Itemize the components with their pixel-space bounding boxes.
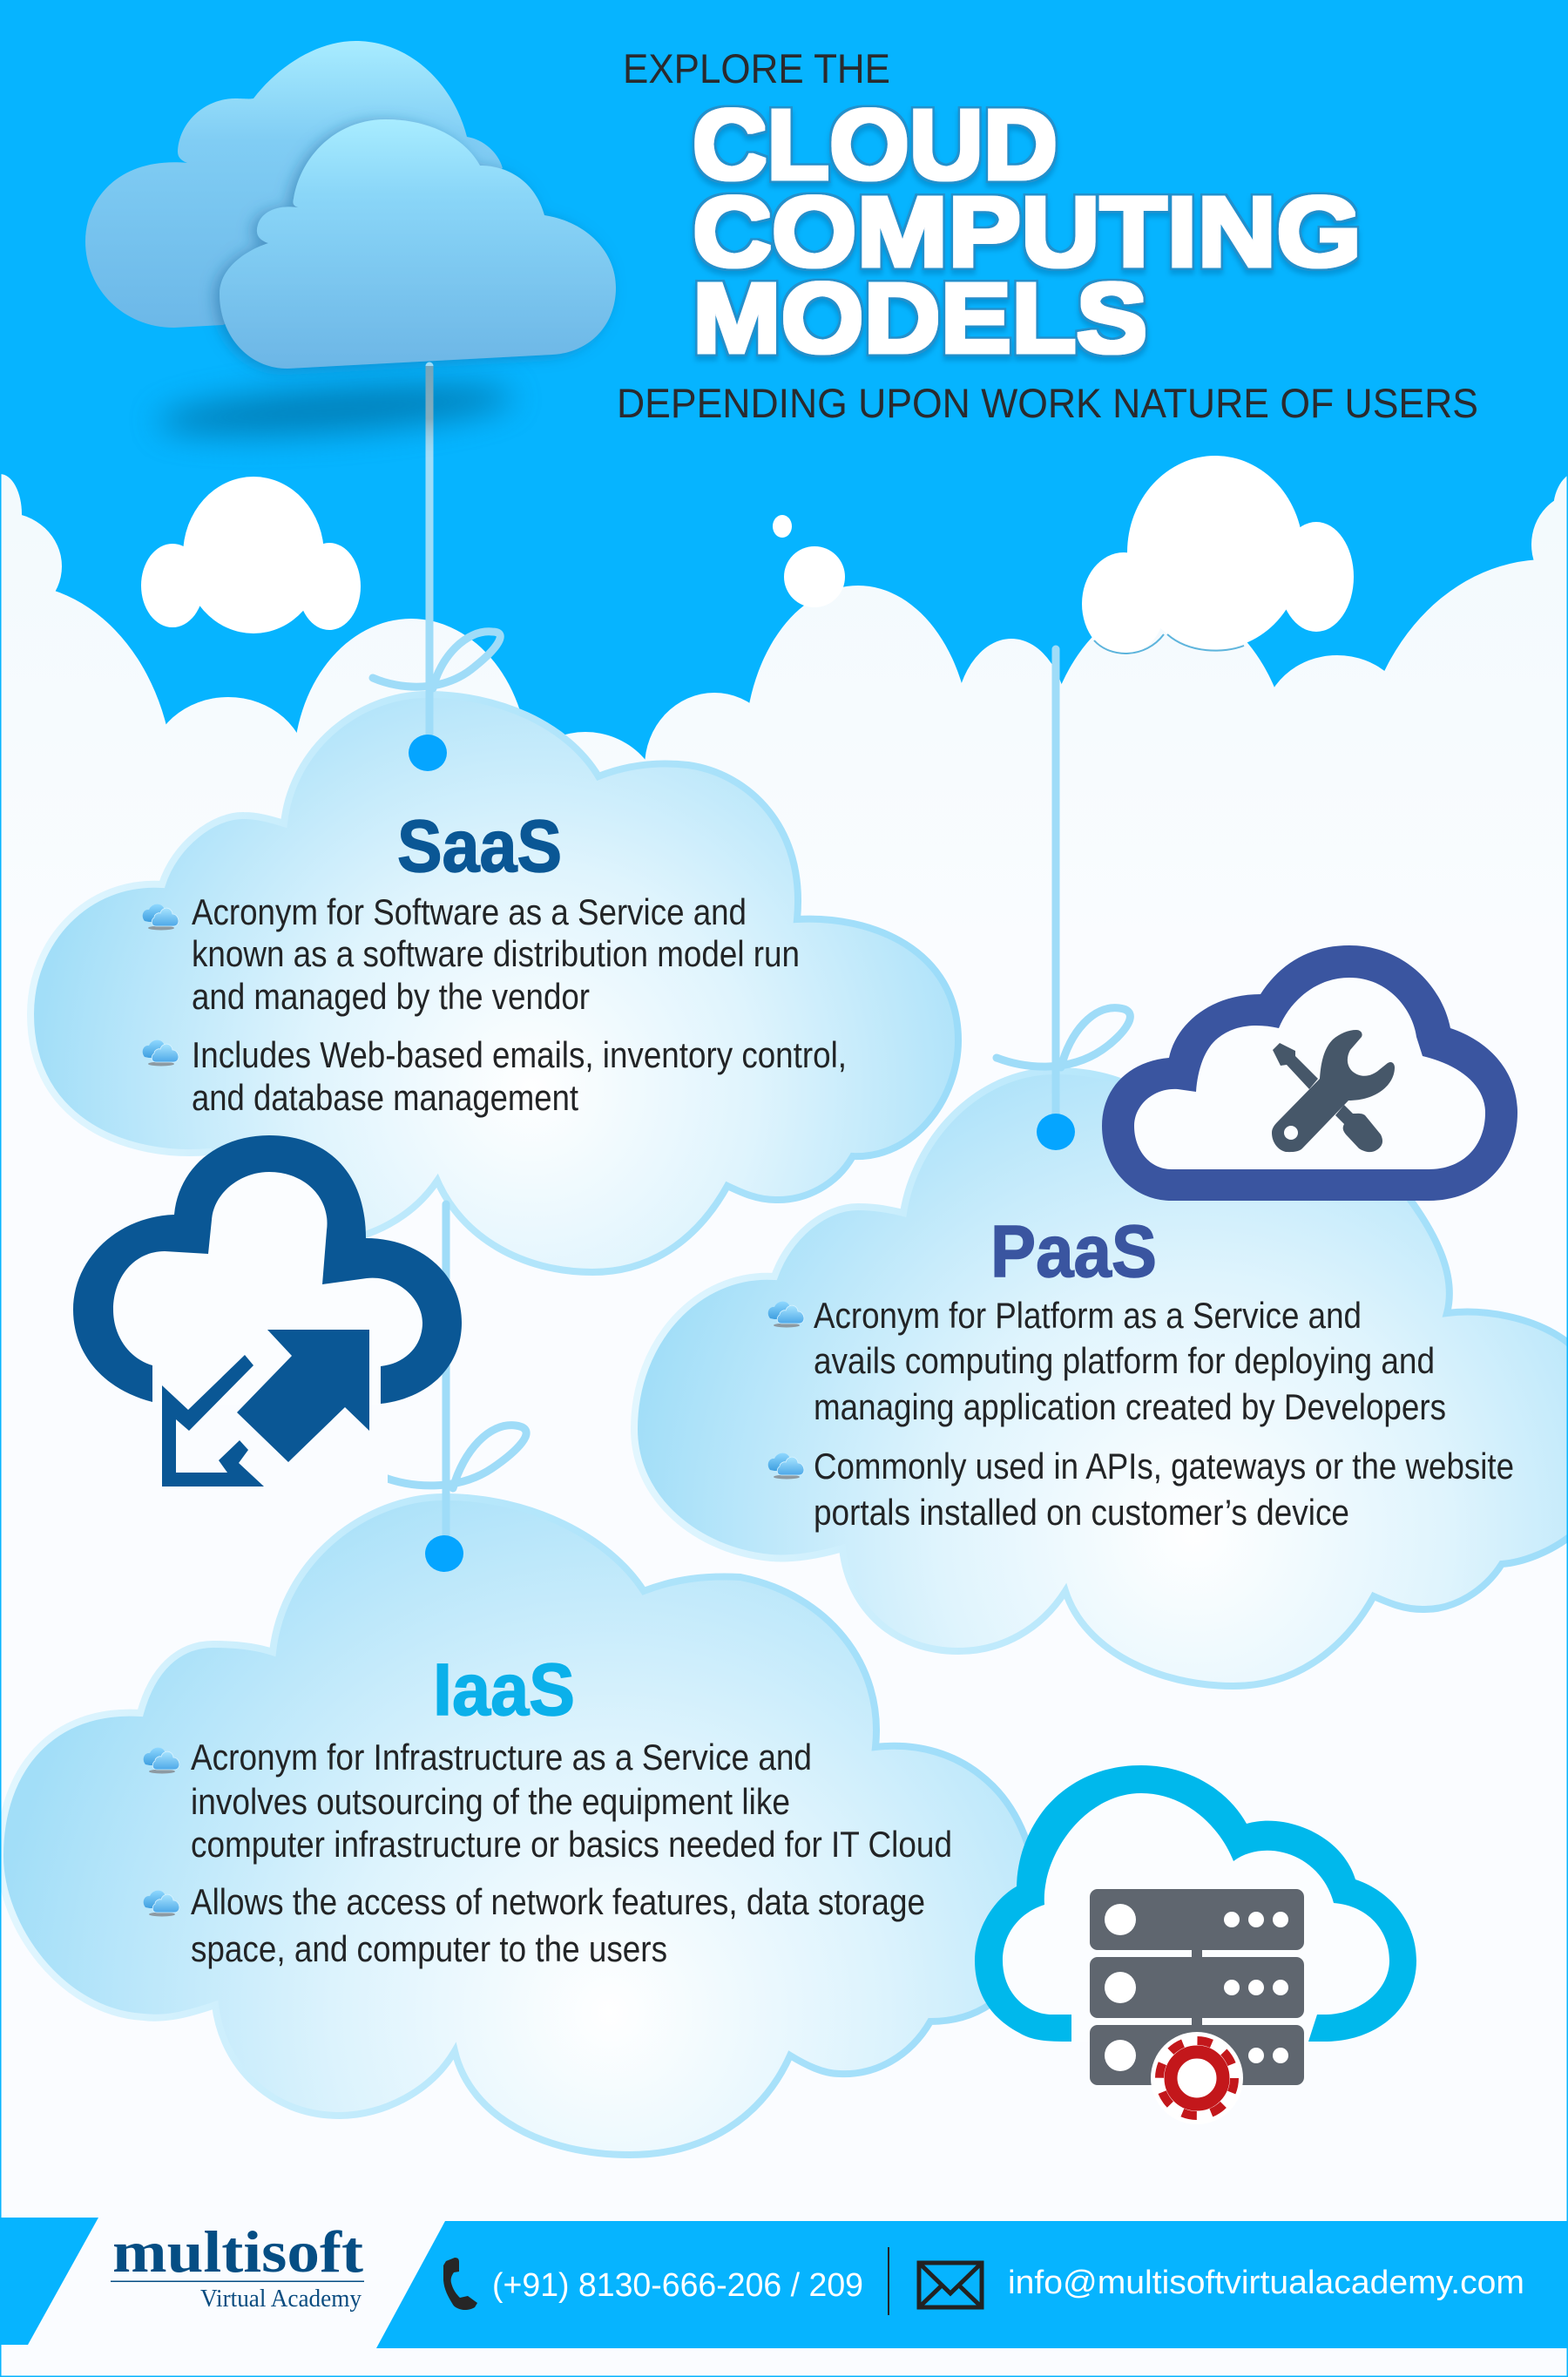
icon: red gear [1151,2032,1243,2124]
SaaS string with bow and pin [373,366,500,771]
floating white cloudlet centre [773,515,845,607]
PaaS bullet 1: Acronym for Platform as a Service and [814,1295,1362,1336]
title block [617,45,1478,426]
footer [0,2218,1568,2348]
icon: phone [443,2258,477,2310]
email: info@multisoftvirtualacademy.com [1008,2265,1524,2301]
icon: envelope [919,2263,982,2307]
IaaS bullet 1: Acronym for Infrastructure as a Service and [191,1737,812,1778]
icon: PaaS cloud with tools [1102,945,1517,1201]
SaaS cloud shape [30,694,958,1272]
IaaS bullet 1: involves outsourcing of the equipment like [191,1781,790,1822]
SaaS bullet 1: and managed by the vendor [192,976,590,1017]
SaaS bullet 2: and database management [192,1077,578,1118]
main title: COMPUTING [693,177,1362,287]
IaaS string with bow and pin [381,1204,526,1572]
logo: Virtual Academy [200,2285,362,2313]
main title: MODELS [693,263,1147,373]
blue sky band [0,0,1568,836]
IaaS bullet 2: space, and computer to the users [191,1928,667,1969]
white cloud landscape [0,471,1568,1011]
SaaS bullet 1 [143,891,800,1017]
phone number: (+91) 8130-666-206 / 209 [492,2267,863,2304]
big 3D cloud with shadow [85,41,616,444]
divider [888,2247,889,2315]
title subline: DEPENDING UPON WORK NATURE OF USERS [617,380,1478,426]
SaaS bullet 1: Acronym for Software as a Service and [192,891,747,932]
footer left band [0,2218,98,2345]
panel: SaaS [30,694,958,1272]
footer contact band [376,2221,1568,2348]
icon: SaaS cloud with arrows [73,1135,462,1500]
SaaS bullet 2 [143,1034,847,1118]
IaaS bullet 1: computer infrastructure or basics needed for IT Cloud [191,1824,952,1865]
IaaS cloud shape [0,1497,1037,2155]
floating white cloud right [1082,456,1354,655]
IaaS bullet 2: Allows the access of network features, data storage [191,1881,925,1922]
IaaS heading: IaaS [433,1649,575,1730]
icon: IaaS cloud with servers and gear [975,1765,1416,2124]
SaaS bullet 2: Includes Web-based emails, inventory control, [192,1034,847,1075]
logo [111,2218,364,2313]
PaaS bullet 1 [768,1295,1446,1427]
PaaS bullet 2 [768,1446,1514,1533]
main title: CLOUD [693,90,1058,200]
SaaS heading: SaaS [397,805,562,887]
IaaS bullet 2 [144,1881,925,1969]
IaaS bullet 1 [144,1737,952,1865]
PaaS cloud shape [634,1071,1568,1686]
PaaS bullet 1: avails computing platform for deploying and [814,1340,1435,1381]
panel: PaaS [634,1071,1568,1686]
title lead-in: EXPLORE THE [623,45,890,91]
PaaS heading: PaaS [990,1210,1157,1292]
panel: IaaS [0,1497,1037,2155]
PaaS string with bow and pin [997,649,1130,1150]
PaaS bullet 1: managing application created by Developers [814,1386,1446,1427]
floating white cloud left [141,477,361,633]
PaaS bullet 2: portals installed on customer’s device [814,1492,1349,1533]
main title [693,90,1362,373]
logo: multisoft [112,2218,363,2285]
SaaS bullet 1: known as a software distribution model run [192,933,800,974]
